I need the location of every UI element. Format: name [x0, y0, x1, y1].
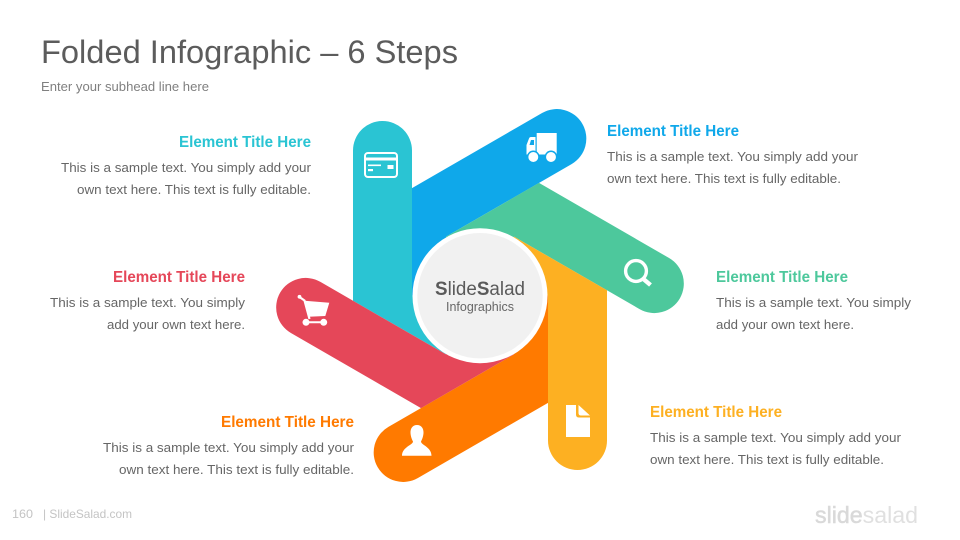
text block: green: Element Title Here	[716, 269, 848, 286]
text block: red: This is a sample text. You simply	[50, 296, 246, 310]
subhead: Enter your subhead line here	[41, 80, 209, 94]
icon: document	[566, 405, 590, 437]
text block: yellow	[650, 404, 901, 467]
text block: red: Element Title Here	[113, 269, 245, 286]
text block: red: add your own text here.	[107, 318, 245, 332]
text block: teal: This is a sample text. You simply add your	[61, 161, 311, 175]
text block: yellow: own text here. This text is fully editable.	[650, 453, 884, 467]
text block: yellow: Element Title Here	[650, 404, 782, 421]
text block: teal	[61, 134, 311, 197]
icon: shopping cart	[298, 295, 329, 326]
folded six-step diagram	[265, 98, 695, 493]
text block: teal: Element Title Here	[179, 134, 311, 151]
text block: orange: own text here. This text is fully editable.	[119, 463, 354, 477]
band: green	[429, 156, 695, 383]
text block: yellow: This is a sample text. You simply add your	[650, 431, 901, 445]
band: teal	[353, 121, 480, 354]
text block: orange: Element Title Here	[221, 414, 354, 431]
text block: orange: This is a sample text. You simply add your	[103, 441, 354, 455]
icon: person	[402, 425, 432, 456]
text block: blue: Element Title Here	[607, 123, 739, 140]
text block: blue: own text here. This text is fully editable.	[607, 172, 841, 186]
text block: green: add your own text here.	[716, 318, 854, 332]
text block: green	[716, 269, 912, 332]
brand label: SlideSalad	[435, 279, 525, 300]
text block: orange	[103, 414, 354, 477]
band: red	[265, 208, 531, 435]
text block: green: This is a sample text. You simply	[716, 296, 912, 310]
center circle	[412, 228, 548, 363]
text block: red	[50, 269, 246, 332]
footer: logo: slidesalad	[815, 502, 918, 528]
icon: credit card	[365, 153, 397, 177]
band: yellow	[480, 237, 607, 470]
icon: magnifier	[626, 261, 650, 285]
icon: truck	[526, 133, 557, 163]
text block: teal: own text here. This text is fully editable.	[77, 183, 311, 197]
footer: page number and site: | SlideSalad.com	[43, 507, 132, 521]
band: blue	[365, 98, 631, 325]
band: orange	[329, 266, 595, 493]
infographics label: Infographics	[446, 300, 514, 314]
text block: blue: This is a sample text. You simply add your	[607, 150, 858, 164]
text block: blue	[607, 123, 858, 186]
footer: page number and site: 160	[12, 507, 33, 521]
title: Folded Infographic – 6 Steps	[41, 34, 458, 70]
